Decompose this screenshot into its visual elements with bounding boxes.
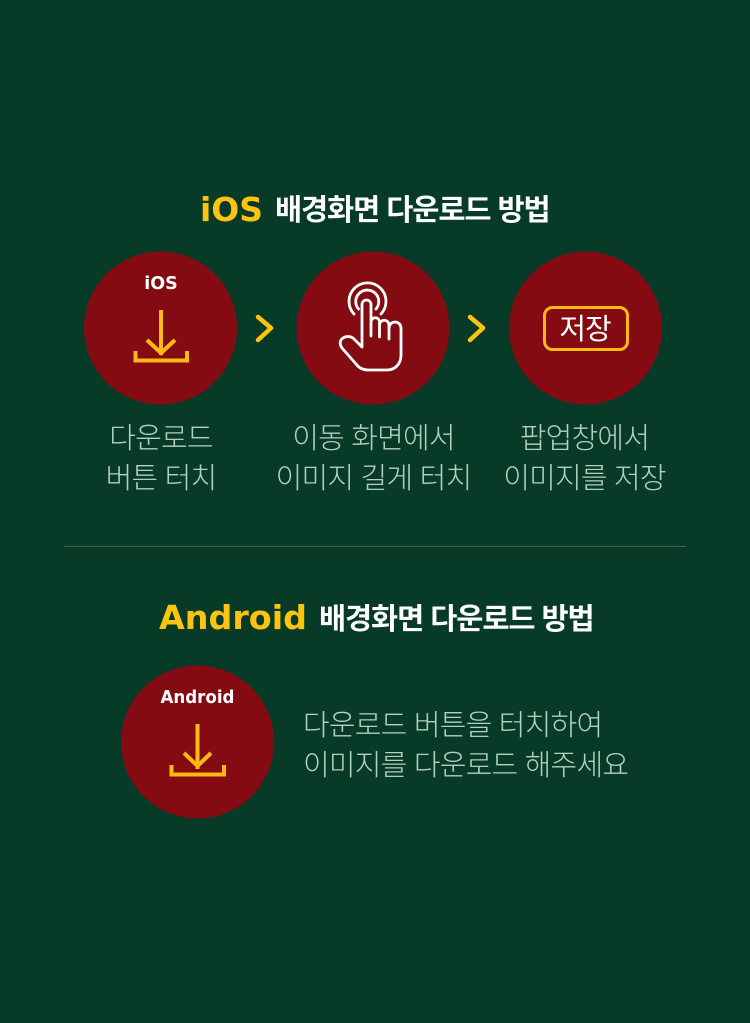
- caption: step 1: 버튼 터치: [106, 455, 216, 497]
- caption: step 3: 팝업창에서: [520, 415, 649, 457]
- step 3: save button icon: [509, 252, 662, 404]
- step 2: touch icon: [296, 252, 450, 404]
- caption: step 2: 이미지 길게 터치: [276, 455, 471, 497]
- arrow 2: [470, 317, 483, 340]
- heading: iOS download method: iOS: [200, 190, 263, 229]
- step 3: save button icon: 저장: [559, 306, 611, 348]
- arrow 1: [258, 317, 271, 340]
- Android download icon: Android: [160, 688, 234, 708]
- heading: iOS download method: 배경화면 다운로드 방법: [275, 187, 549, 229]
- step 1: iOS download icon: iOS: [144, 274, 178, 294]
- heading: Android download method: [159, 596, 593, 638]
- caption: step 1: 다운로드: [109, 415, 213, 457]
- heading: Android download method: 배경화면 다운로드 방법: [319, 596, 593, 638]
- step 1: iOS download icon: [84, 252, 237, 404]
- Android download icon: [121, 666, 274, 818]
- Android instructions: 다운로드 버튼을 터치하여: [303, 702, 602, 744]
- caption: step 2: 이동 화면에서: [292, 415, 455, 457]
- heading: Android download method: Android: [159, 598, 307, 637]
- caption: step 3: 이미지를 저장: [503, 455, 666, 497]
- Android instructions: 이미지를 다운로드 해주세요: [303, 742, 628, 784]
